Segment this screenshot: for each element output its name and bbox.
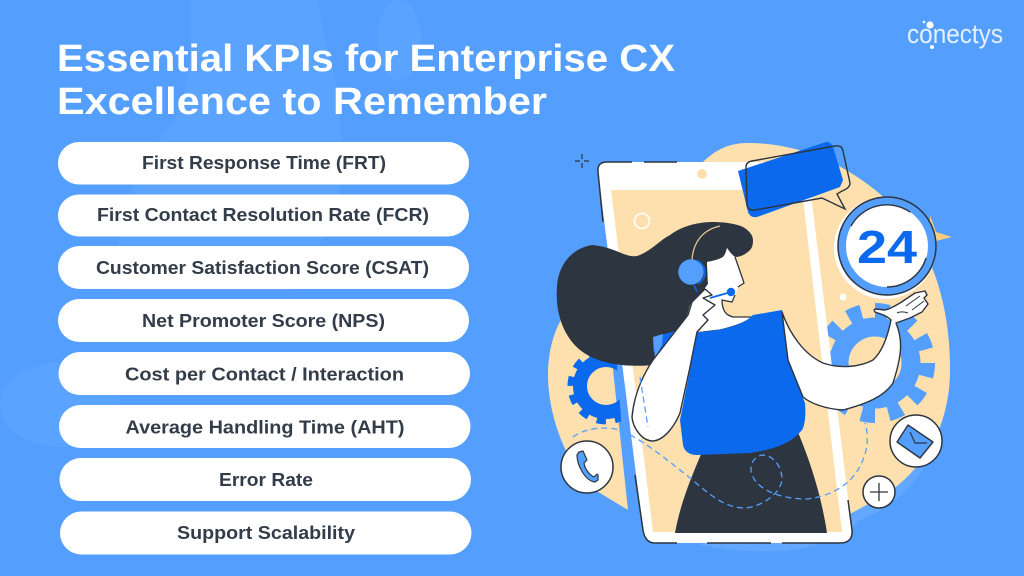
KPI pill: First Contact Resolution Rate xyxy=(58,194,469,236)
KPI pill: First Response Time: First Response Time (FRT) xyxy=(142,152,386,173)
KPI pill: Net Promoter Score xyxy=(58,299,469,342)
star accent xyxy=(930,215,952,255)
dashed connection lines xyxy=(573,377,867,508)
KPI pill: Support Scalability: Support Scalability xyxy=(177,522,356,543)
chat bubble xyxy=(738,142,850,217)
KPI pill: Average Handling Time: Average Handling Time (AHT) xyxy=(126,416,404,438)
KPI pill: Support Scalability xyxy=(60,512,472,554)
title xyxy=(57,38,676,123)
right arm and hand xyxy=(782,291,928,410)
KPI pill: Customer Satisfaction Score xyxy=(58,246,469,289)
background blob xyxy=(548,143,950,540)
hair xyxy=(557,222,753,366)
icon: envelope xyxy=(890,415,942,467)
KPI pill: First Response Time xyxy=(58,142,469,184)
KPI pill: Average Handling Time xyxy=(59,405,470,448)
KPI pill: Cost per Contact xyxy=(58,352,470,395)
title: Excellence to Remember xyxy=(57,81,547,123)
illustration: support agent with phone xyxy=(548,142,952,551)
KPI pill: Error Rate: Error Rate xyxy=(219,469,313,490)
KPI pill: First Contact Resolution Rate: First Contact Resolution Rate (FCR) xyxy=(97,204,429,225)
microphone xyxy=(710,288,735,298)
blouse xyxy=(653,310,805,455)
left arm and hand xyxy=(632,289,715,441)
KPI pill: Error Rate xyxy=(60,458,471,501)
headset xyxy=(678,226,720,292)
24 hour badge: 24 xyxy=(857,221,917,273)
gear: right xyxy=(823,311,927,415)
KPI list xyxy=(58,142,472,554)
icon: plus xyxy=(863,476,895,508)
24 hour badge xyxy=(834,197,936,299)
KPI pill: Customer Satisfaction Score: Customer Satisfaction Score (CSAT) xyxy=(96,257,429,278)
face and neck xyxy=(690,248,753,332)
sparkle xyxy=(575,154,589,168)
phone frame xyxy=(598,162,852,543)
title: Essential KPIs for Enterprise CX xyxy=(57,38,676,80)
logo: conectys: conectys xyxy=(907,19,1003,49)
icon: phone call xyxy=(561,441,613,493)
KPI pill: Cost per Contact: Cost per Contact / Interaction xyxy=(125,364,404,384)
gear: left xyxy=(572,352,640,420)
skirt xyxy=(675,430,827,533)
KPI pill: Net Promoter Score: Net Promoter Score (NPS) xyxy=(142,310,385,331)
